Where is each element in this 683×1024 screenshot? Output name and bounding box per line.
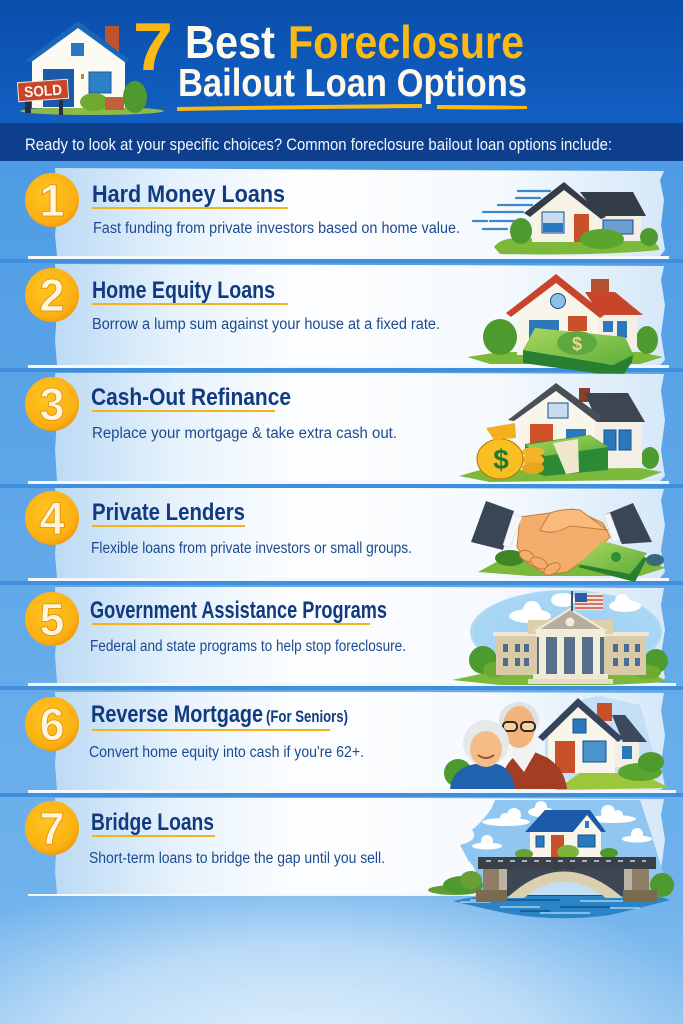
number badge 1: 1 — [39, 175, 65, 226]
icon: senior couple and house — [444, 696, 670, 790]
number badge 7: 7 — [39, 803, 65, 854]
number badge 6: 6 — [39, 699, 65, 750]
heading: Home Equity Loans — [92, 277, 275, 304]
subtitle band — [0, 123, 683, 161]
number badge 4 — [25, 491, 79, 545]
description: Convert home equity into cash if you're 62+. — [89, 744, 364, 761]
subtitle band: Ready to look at your specific choices? Common foreclosure bailout loan options include: — [25, 135, 612, 154]
underline — [92, 729, 330, 731]
number badge 3: 3 — [39, 379, 65, 430]
water — [453, 895, 670, 918]
panel: 1 hard money loans — [0, 168, 683, 263]
number badge 2 — [25, 268, 79, 322]
header banner — [0, 0, 683, 124]
panel: 4 private lenders — [0, 488, 683, 585]
heading: Reverse Mortgage — [91, 701, 263, 728]
heading: Private Lenders — [92, 499, 245, 526]
title — [133, 9, 527, 111]
icon: house with cash stack — [467, 274, 663, 377]
sold sign: SOLD — [24, 82, 63, 101]
icon: handshake with cash — [471, 501, 665, 582]
description: Replace your mortgage & take extra cash out. — [92, 425, 397, 442]
heading: Hard Money Loans — [92, 181, 285, 208]
icon: house on bridge over water — [428, 800, 674, 918]
number badge 7 — [25, 801, 79, 855]
underline — [92, 623, 370, 625]
number badge 5: 5 — [39, 594, 65, 645]
heading: Government Assistance Programs — [90, 597, 387, 624]
heading: Bridge Loans — [91, 809, 214, 836]
icon: house with speed lines — [473, 182, 659, 254]
flag — [575, 593, 603, 610]
underline — [92, 835, 215, 837]
number badge 4: 4 — [39, 493, 65, 544]
description: Fast funding from private investors based on home value. — [93, 220, 460, 237]
icon: house with cash stack: $ — [572, 334, 582, 354]
description: Federal and state programs to help stop foreclosure. — [90, 638, 406, 655]
underline — [92, 207, 288, 209]
number badge 1 — [25, 173, 79, 227]
title: Best — [185, 16, 275, 68]
heading: Cash-Out Refinance — [91, 384, 291, 411]
icon: house with money bag — [459, 383, 662, 482]
number badge 6 — [25, 697, 79, 751]
icon: house with money bag: $ — [493, 444, 509, 475]
panel: 7 bridge loans — [25, 798, 674, 918]
number badge 5 — [25, 592, 79, 646]
number badge 3 — [25, 377, 79, 431]
description: Borrow a lump sum against your house at a fixed rate. — [92, 316, 440, 333]
title: Bailout Loan Options — [178, 62, 527, 105]
number badge 2: 2 — [39, 270, 65, 321]
panel: 5 government assistance programs — [0, 587, 683, 690]
heading: (For Seniors) — [266, 707, 348, 726]
icon: sold house — [17, 21, 164, 115]
panel: 2 home equity loans — [0, 264, 683, 377]
panel: 3 cash-out refinance — [0, 373, 683, 488]
description: Short-term loans to bridge the gap until you sell. — [89, 850, 385, 867]
underline — [92, 525, 245, 527]
title: Foreclosure — [288, 16, 524, 68]
underline — [92, 303, 288, 305]
description: Flexible loans from private investors or small groups. — [91, 540, 412, 557]
icon: government building with flag — [452, 590, 668, 685]
panel: 6 reverse mortgage — [0, 692, 683, 797]
underline — [92, 410, 275, 412]
title: 7 — [133, 9, 173, 85]
